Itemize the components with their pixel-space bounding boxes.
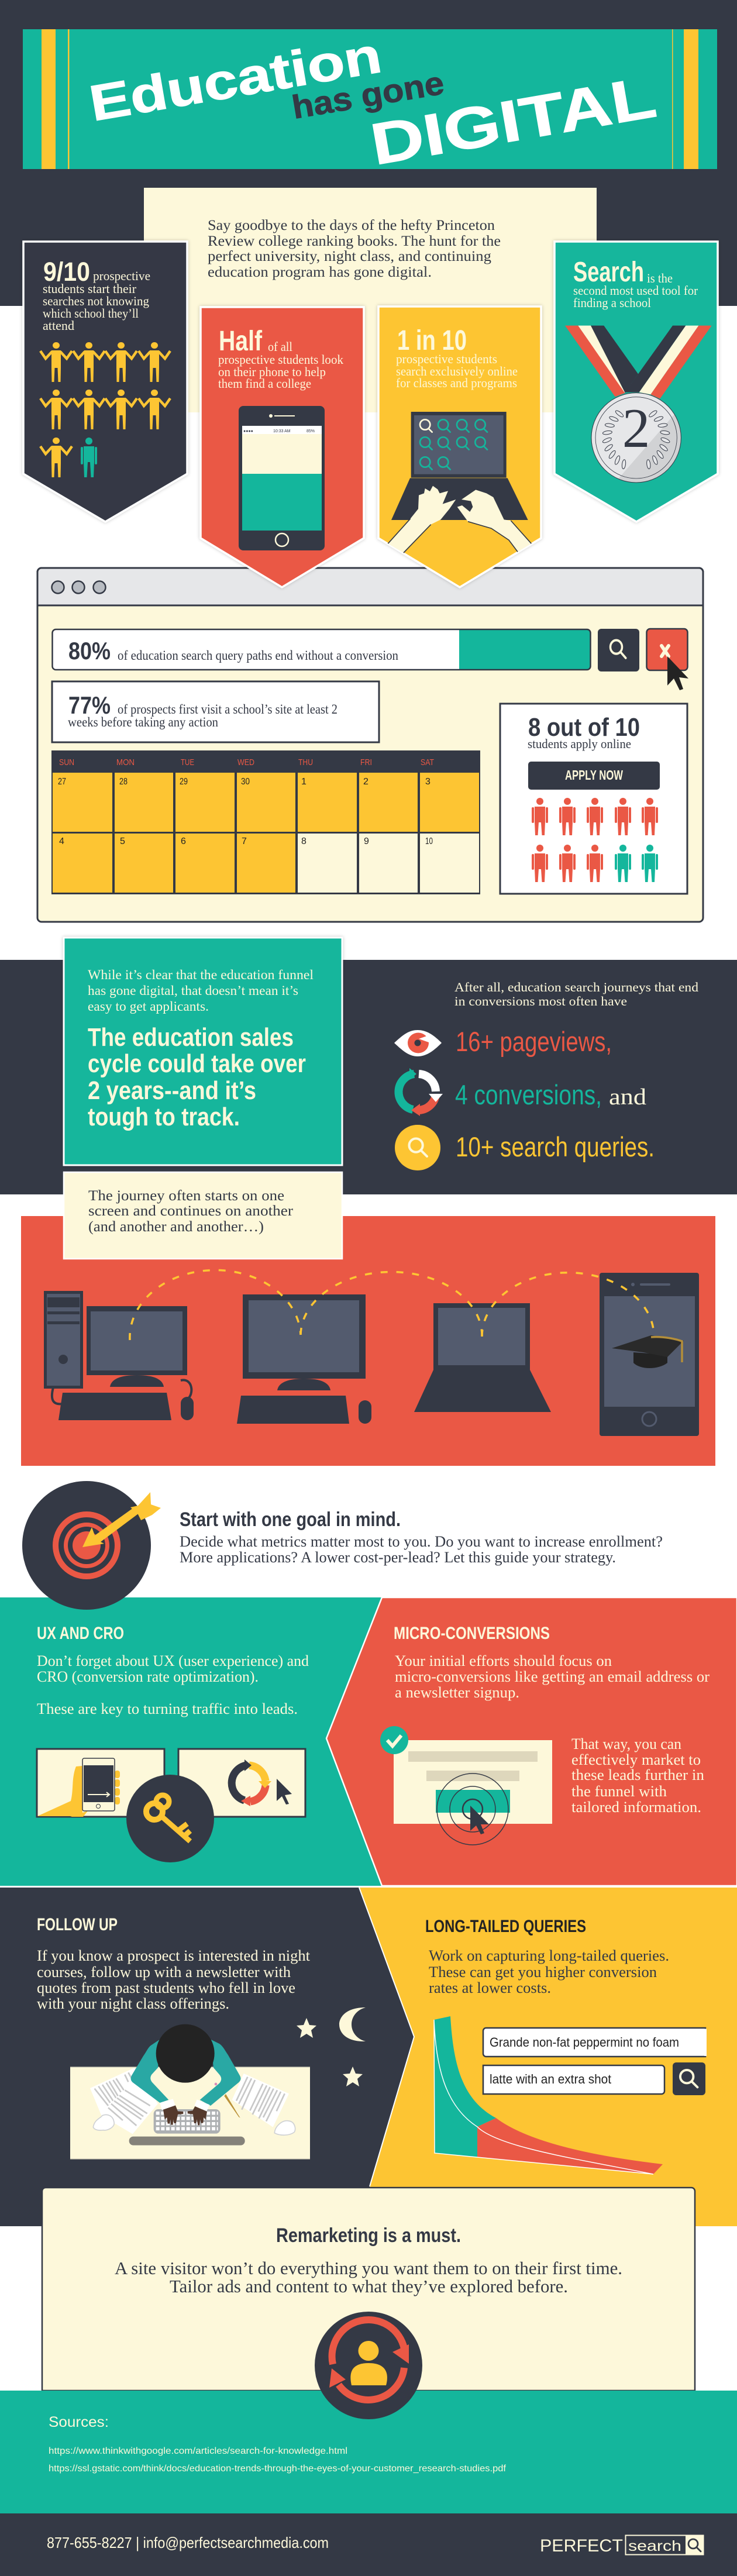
heading <box>88 1023 306 1131</box>
icon: target with arrow <box>22 1481 161 1610</box>
stat box: 77%: 77% <box>68 691 111 719</box>
wreath <box>602 409 670 469</box>
calendar dates: 29 <box>180 777 188 787</box>
box: phone in hand <box>37 1749 164 1817</box>
body text: the funnel with <box>571 1783 667 1800</box>
calendar header: SAT <box>421 757 434 767</box>
search box: long query <box>483 2028 707 2057</box>
section: dark and yellow split <box>0 1888 737 2226</box>
stat box: 77% <box>52 681 379 742</box>
text: journeys intro: in conversions most often have <box>454 994 627 1008</box>
text: goal body <box>180 1533 663 1566</box>
intro text <box>208 218 501 280</box>
icon: key <box>126 1775 214 1862</box>
ripple clicks <box>437 1773 508 1845</box>
heading: start with one goal: Start with one goal in mind. <box>180 1509 401 1531</box>
calendar dates: 9 <box>364 836 369 846</box>
stat box: 8 out of 10: 8 out of 10 <box>528 713 640 742</box>
source links: https://ssl.gstatic.com/think/docs/education-trends-through-the-eyes-of-your-customer_research-studies.pdf <box>49 2464 507 2474</box>
icon: eye <box>394 1030 442 1056</box>
calendar dates: 8 <box>301 836 306 846</box>
device: tablet with graduation cap <box>600 1273 699 1436</box>
search button <box>673 2062 705 2095</box>
search bar: 80%: 80% <box>68 637 111 664</box>
icon: checkmark <box>380 1726 408 1754</box>
stat box: 77%: of prospects first visit a school’s site at least 2 <box>118 702 337 717</box>
panel: follow up <box>37 1915 366 2160</box>
ribbon text: them find a college <box>218 376 311 391</box>
body text: If you know a prospect is interested in night <box>37 1947 311 1964</box>
source links <box>49 2446 507 2474</box>
device: laptop <box>414 1303 551 1412</box>
intro text: Review college ranking books. The hunt for the <box>208 233 501 249</box>
ribbon: 1 in 10 <box>378 306 541 587</box>
text <box>88 967 314 1014</box>
calendar header: SUN <box>59 757 74 767</box>
calendar dates: 5 <box>120 836 125 846</box>
panel: micro-conversions: MICRO-CONVERSIONS <box>394 1624 550 1643</box>
source links: https://www.thinkwithgoogle.com/articles/search-for-knowledge.html <box>49 2446 347 2456</box>
icon: moon <box>339 2007 366 2041</box>
logo <box>540 2535 704 2556</box>
ribbon text: prospective students <box>396 352 497 366</box>
calendar dates <box>58 777 433 846</box>
intro text: perfect university, night class, and continuing <box>208 249 492 264</box>
stat box: 77%: weeks before taking any action <box>68 715 218 729</box>
dashed path <box>130 1270 653 1340</box>
close button <box>647 629 688 670</box>
panel: follow up: FOLLOW UP <box>37 1915 118 1934</box>
icon: remarketing person with arrows <box>315 2312 422 2419</box>
search bar: 80%: of education search query paths end without a conversion <box>118 648 398 663</box>
form illustration <box>380 1726 552 1845</box>
cursor <box>470 1806 489 1834</box>
crumpled paper <box>93 2114 295 2135</box>
chart: long tail curve <box>434 2016 663 2174</box>
ribbon: half: Half <box>219 326 263 357</box>
calendar header: MON <box>116 757 135 767</box>
stat: search queries: 10+ search queries. <box>456 1131 655 1162</box>
ribbon text: searches not knowing <box>43 294 149 308</box>
icon: laptop with hands <box>388 412 531 553</box>
cursor <box>667 656 688 690</box>
background: top dark band <box>0 0 737 306</box>
calendar dates: 6 <box>181 836 186 846</box>
calendar header: FRI <box>360 757 372 767</box>
panel: sales cycle <box>64 938 342 1165</box>
stat box: 8 out of 10 <box>500 704 687 894</box>
panel: journey note: screen and continues on another <box>88 1203 294 1219</box>
calendar dates: 28 <box>119 777 128 787</box>
device: desktop tower with monitor <box>44 1291 194 1420</box>
text: journeys intro <box>454 980 698 1008</box>
panel: remarketing <box>42 2188 695 2391</box>
search icons on screen <box>420 419 487 470</box>
body text: a newsletter signup. <box>395 1684 519 1701</box>
search bar: 80% <box>53 629 591 670</box>
body text: A site visitor won’t do everything you want them to on their first time. <box>115 2258 622 2278</box>
stat: conversions: 4 conversions, <box>455 1079 602 1110</box>
ribbon text: prospective students look <box>218 352 343 367</box>
calendar dates: 27 <box>58 777 66 787</box>
section: sources: Sources: <box>49 2414 109 2430</box>
text: has gone digital, that doesn’t mean it’s <box>88 983 298 998</box>
stat: pageviews: 16+ pageviews, <box>456 1026 612 1057</box>
calendar <box>51 750 480 894</box>
panel: journey note: The journey often starts on one <box>88 1188 284 1204</box>
calendar dates: 2 <box>363 777 368 787</box>
text: goal body: More applications? A lower cost-per-lead? Let this guide your strategy. <box>180 1549 616 1566</box>
ribbon text <box>573 271 698 310</box>
device: desktop monitor <box>237 1294 371 1424</box>
ribbon text <box>396 352 518 390</box>
text: journeys intro: After all, education search journeys that end <box>454 980 698 994</box>
calendar dates: 1 <box>301 777 306 787</box>
calendar header <box>59 757 434 767</box>
title: has gone: has gone <box>290 64 446 126</box>
stat: pageviews <box>394 1026 612 1057</box>
icon: cycle <box>398 1068 443 1116</box>
logo: PERFECT <box>540 2536 623 2556</box>
body text: Your initial efforts should focus on <box>395 1652 612 1669</box>
body text: These can get you higher conversion <box>429 1964 657 1981</box>
cursor <box>277 1779 292 1804</box>
ribbon: search: Search <box>573 257 644 288</box>
stat: search queries <box>395 1125 655 1170</box>
window buttons <box>51 581 105 593</box>
heading: 2 years--and it’s <box>88 1076 256 1105</box>
ribbon text: is the <box>647 271 673 285</box>
heading: cycle could take over <box>88 1049 306 1078</box>
stat: conversions: and <box>609 1084 647 1110</box>
search box: long query: Grande non-fat peppermint no foam <box>490 2035 679 2050</box>
ribbon text: finding a school <box>573 295 651 310</box>
stat: conversions <box>398 1068 647 1116</box>
calendar dates: 3 <box>425 777 431 787</box>
calendar header: WED <box>237 757 254 767</box>
panel: devices <box>21 1216 715 1466</box>
body text: tailored information. <box>571 1799 701 1816</box>
people: 8 of 10 <box>532 798 658 882</box>
text: goal body: Decide what metrics matter most to you. Do you want to increase enrollment? <box>180 1533 663 1550</box>
icon: search <box>395 1125 440 1170</box>
icon: phone: 85% <box>306 429 315 433</box>
panel: micro-conversions <box>380 1624 710 1845</box>
body text: Tailor ads and content to what they’ve explored before. <box>170 2276 568 2296</box>
panel: remarketing: Remarketing is a must. <box>276 2224 461 2247</box>
ribbon text: for classes and programs <box>396 376 517 390</box>
title banner <box>23 27 717 178</box>
illustration: person at desk <box>70 2024 310 2160</box>
heading: tough to track. <box>88 1103 240 1131</box>
section: sources <box>0 2391 737 2513</box>
box: cycle and cursor <box>178 1749 305 1817</box>
ribbon text: prospective <box>93 268 150 283</box>
ribbon text: of all <box>268 339 292 354</box>
panel: ux and cro: UX AND CRO <box>37 1624 124 1643</box>
panel: journey note <box>64 1172 342 1259</box>
heading: The education sales <box>88 1023 294 1052</box>
browser window <box>37 568 703 922</box>
ribbon text: second most used tool for <box>573 283 698 298</box>
icon: star <box>297 2018 316 2038</box>
body text: with your night class offerings. <box>37 1995 229 2012</box>
ribbon text: attend <box>43 318 74 333</box>
ribbon text <box>218 339 343 391</box>
icon: phone: 10:33 AM <box>273 429 291 433</box>
icon: medal: 2 <box>622 397 650 459</box>
intro text: Say goodbye to the days of the hefty Princeton <box>208 218 495 233</box>
panel: journey note: (and another and another…) <box>88 1219 264 1235</box>
logo: search <box>628 2538 681 2554</box>
contact: 877-655-8227 | info@perfectsearchmedia.com <box>47 2534 329 2551</box>
body text <box>37 1652 309 1717</box>
body text <box>115 2258 622 2296</box>
calendar header: THU <box>298 757 313 767</box>
apply now button <box>528 762 660 790</box>
body text: quotes from past students who fell in love <box>37 1979 295 1996</box>
title: Education: Education <box>85 27 385 132</box>
calendar cells <box>53 773 479 893</box>
body text <box>37 1947 311 2012</box>
body text: Don’t forget about UX (user experience) and <box>37 1652 309 1669</box>
panel: long-tailed queries: LONG-TAILED QUERIES <box>425 1917 586 1936</box>
panel: long-tailed queries <box>425 1917 707 2174</box>
body text: rates at lower costs. <box>429 1979 551 1996</box>
section: teal and red split <box>0 1597 737 1886</box>
search button <box>598 629 639 671</box>
icon: phone: ●●●● <box>243 429 253 433</box>
body text: effectively market to <box>571 1751 701 1768</box>
icon: medal <box>565 326 712 484</box>
ribbon text: which school they’ll <box>43 306 139 321</box>
body text <box>395 1652 710 1816</box>
ribbon text: on their phone to help <box>218 364 326 379</box>
intro text: education program has gone digital. <box>208 264 432 280</box>
search box: short query <box>483 2065 664 2094</box>
calendar dates: 4 <box>59 836 64 846</box>
text: easy to get applicants. <box>88 999 209 1014</box>
body text: These are key to turning traffic into leads. <box>37 1700 298 1717</box>
body text: these leads further in <box>571 1766 704 1783</box>
ribbon text: students start their <box>43 281 137 296</box>
footer <box>0 2513 737 2576</box>
icon: phone <box>239 406 325 550</box>
body text: CRO (conversion rate optimization). <box>37 1668 259 1685</box>
ribbon text <box>43 268 150 333</box>
body text: Work on capturing long-tailed queries. <box>429 1947 669 1964</box>
icon: star <box>343 2067 363 2086</box>
calendar dates: 10 <box>425 836 433 846</box>
stat box: 8 out of 10: students apply online <box>528 736 631 751</box>
body text <box>429 1947 669 1996</box>
text: While it’s clear that the education funnel <box>88 967 314 982</box>
ribbon: 1 in 10: 1 in 10 <box>397 325 467 356</box>
section: dark band <box>0 960 737 1194</box>
ribbon: 9/10: 9/10 <box>43 257 90 287</box>
people: 9 of 10 <box>40 342 170 477</box>
calendar dates: 7 <box>242 836 247 846</box>
body text: That way, you can <box>571 1735 681 1752</box>
search box: short query: latte with an extra shot <box>490 2072 611 2086</box>
intro panel <box>144 188 597 412</box>
ribbon: half <box>201 307 364 587</box>
body text: micro-conversions like getting an email address or <box>395 1668 710 1685</box>
body text: courses, follow up with a newsletter with <box>37 1964 291 1981</box>
ribbon: 9/10 <box>23 242 187 522</box>
panel: ux and cro <box>37 1624 309 1862</box>
apply now button: APPLY NOW <box>565 767 623 783</box>
ribbon text: search exclusively online <box>396 364 518 378</box>
icon: graduation cap <box>612 1335 684 1368</box>
calendar header: TUE <box>181 757 194 767</box>
title: DIGITAL: DIGITAL <box>366 64 661 178</box>
calendar dates: 30 <box>241 777 250 787</box>
ribbon: search <box>555 242 718 522</box>
